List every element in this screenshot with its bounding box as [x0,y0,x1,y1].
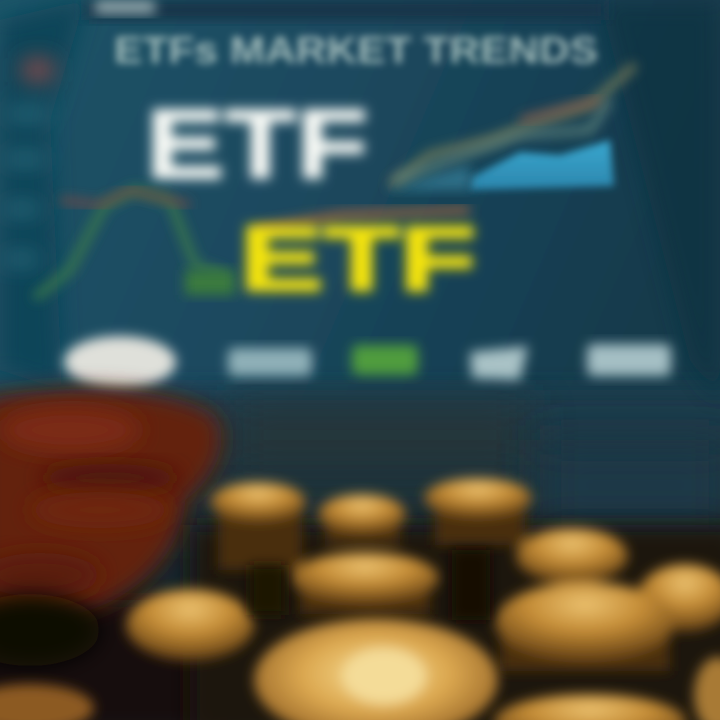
title: white ETF: ETF [146,89,368,199]
coin: right [516,528,628,584]
dark gaps [250,550,490,620]
data labels row [64,336,671,388]
coin: bottom left [0,684,94,720]
hand [0,389,222,666]
coin: back left [210,482,306,570]
coin: back centre [318,494,406,544]
small logo mark [95,0,155,14]
heading: ETFs MARKET TRENDS [114,30,598,72]
coin: right large [495,582,675,671]
coin: back right [424,478,532,545]
highlight: yellow ETF: ETF [240,208,476,310]
coin: far right [637,564,720,632]
coin: bottom right [494,694,686,720]
coin pile [0,478,720,720]
shadow: lower left [0,600,220,720]
coin: far right edge [694,657,720,720]
sidebar marks [5,58,54,263]
line chart: upper right [385,65,635,190]
coin: left [126,589,254,661]
coin: front large [254,618,498,720]
coin: middle [291,552,439,614]
line chart: left [35,190,235,298]
